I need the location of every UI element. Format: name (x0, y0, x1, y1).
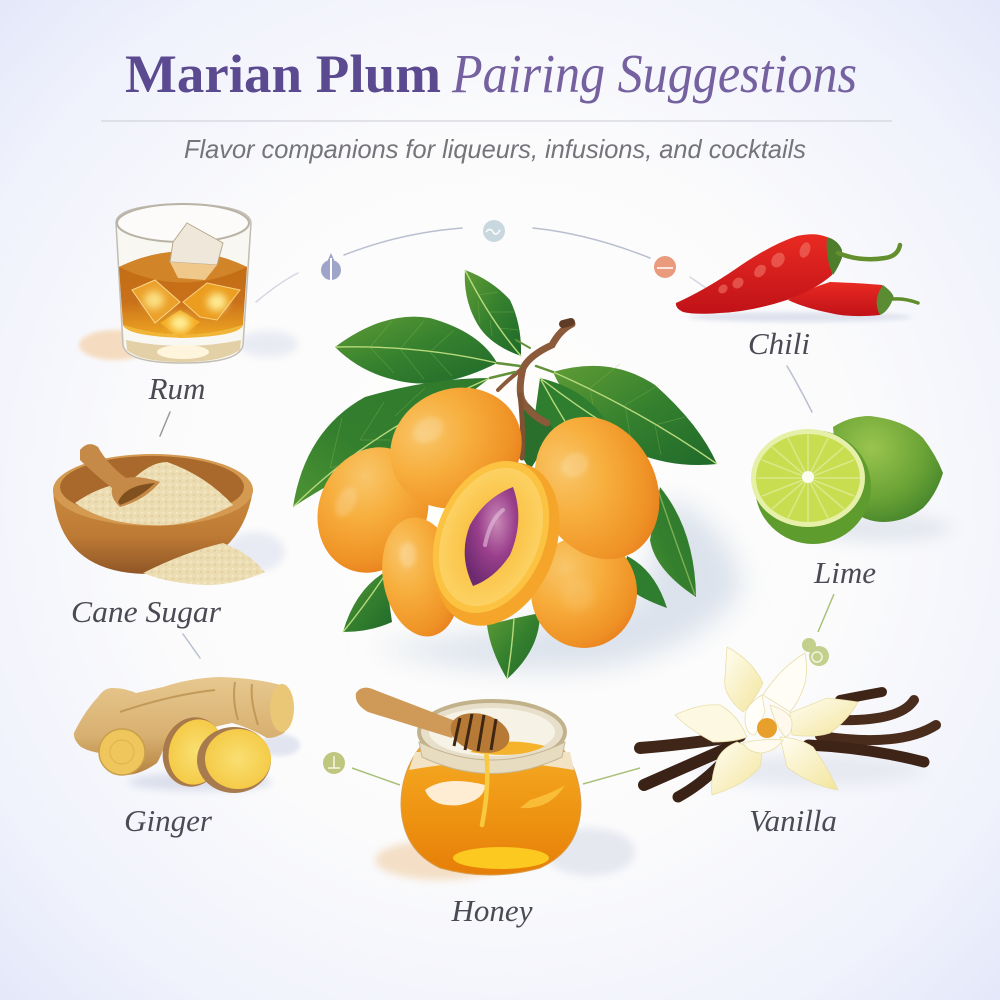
central marian plum cluster (293, 270, 742, 679)
label: Ginger (124, 803, 213, 838)
item: rum glass (79, 204, 298, 406)
label: Rum (148, 371, 205, 406)
subtitle: Flavor companions for liqueurs, infusions, and cocktails (184, 134, 806, 164)
label: Cane Sugar (71, 594, 222, 629)
jar body (401, 745, 581, 875)
icon: rum node (321, 253, 341, 280)
fruit: bottom left (373, 511, 469, 643)
icon: ginger node (323, 752, 345, 774)
icon: top node (483, 220, 505, 242)
item: honey jar (356, 688, 635, 928)
fruit: upper left (371, 367, 541, 529)
item: chili peppers (676, 234, 918, 361)
label: Lime (813, 555, 876, 590)
flower (675, 647, 858, 795)
label: Honey (451, 893, 533, 928)
item: ginger (74, 677, 300, 838)
icon: vanilla node (802, 638, 829, 666)
label: Chili (748, 326, 810, 361)
title: Pairing Suggestions (451, 43, 857, 104)
fruit: right (511, 395, 683, 581)
connector arcs (160, 228, 834, 785)
title: Marian Plum (125, 44, 441, 104)
scoop (80, 444, 160, 507)
jar rim (419, 701, 565, 763)
honey drip (482, 750, 487, 825)
fruit: halved with seed (411, 443, 583, 645)
spilled sugar (143, 543, 265, 585)
stem (490, 322, 572, 458)
fruit: left (299, 430, 447, 590)
ice cubes (170, 223, 223, 265)
dipper (356, 688, 458, 738)
cluster shadow (368, 495, 742, 670)
leaves behind fruit (293, 270, 717, 679)
item: cane sugar bowl (53, 444, 285, 629)
label: Vanilla (749, 803, 837, 838)
item: lime (751, 416, 952, 590)
title (125, 43, 857, 104)
lower chili (788, 282, 887, 316)
fruit: bottom right (531, 536, 637, 648)
upper chili (676, 234, 834, 314)
icon: chili node (654, 256, 676, 278)
item: vanilla (640, 647, 936, 838)
seed (465, 487, 518, 586)
